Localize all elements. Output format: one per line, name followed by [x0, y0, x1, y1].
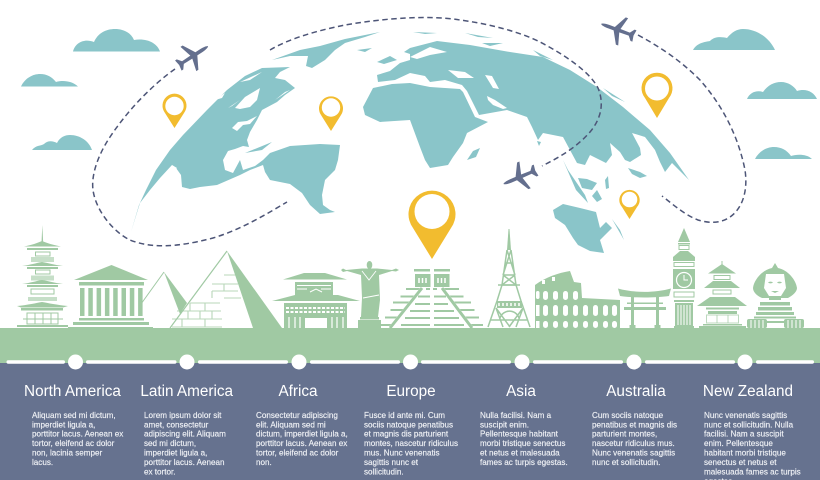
body text: habitant morbi tristique: [704, 449, 786, 458]
body text: non, lacinia semper: [32, 449, 102, 458]
column: North America: [24, 383, 123, 467]
landmark: small pyramid: [141, 272, 187, 314]
body text: penatibus et magnis dis: [592, 420, 677, 429]
heading: New Zealand: [703, 383, 793, 400]
body text: tortor, eleifend ac dolor: [256, 449, 339, 458]
body text: adipiscing elit. Aliquam: [144, 430, 226, 439]
body text: montes, nascetur ridiculus: [364, 439, 458, 448]
body text: mus. Nunc venenatis: [364, 449, 440, 458]
body text: parturient montes,: [592, 430, 657, 439]
landmark: torii gate: [618, 288, 671, 328]
column: New Zealand: [703, 383, 801, 480]
body text: nunc et sollicitudin. Nulla: [704, 420, 794, 429]
body text: elit. Aliquam sed mi: [256, 420, 326, 429]
body text: amet, consectetur: [144, 420, 209, 429]
landmark: Christ the Redeemer: [341, 261, 399, 328]
body text: dictum, imperdiet ligula a,: [256, 430, 348, 439]
Africa: [363, 83, 488, 168]
body text: sociis natoque penatibus: [364, 420, 453, 429]
pin 3: [641, 73, 672, 118]
location pins: [162, 73, 672, 259]
timeline: [6, 354, 814, 370]
landmarks skyline: [17, 225, 804, 328]
body text: Aliquam sed mi dictum,: [32, 411, 116, 420]
heading: North America: [24, 383, 121, 400]
body text: Nunc venenatis sagittis: [592, 449, 675, 458]
body text: nunc et sollicitudin.: [592, 458, 660, 467]
airplanes: [170, 10, 639, 197]
body text: Lorem ipsum dolor sit: [144, 411, 221, 420]
body text: Nulla facilisi. Nam a: [480, 411, 551, 420]
body text: senectus et netus et: [704, 458, 777, 467]
destinations panel: [0, 354, 820, 480]
body text: tortor, eleifend ac dolor: [32, 439, 115, 448]
clouds: [21, 29, 817, 159]
sea details: [172, 47, 507, 170]
body text: enim. Pellentesque: [704, 439, 773, 448]
pin 4: [619, 190, 640, 219]
column: Australia: [592, 383, 677, 467]
body text: suscipit enim.: [480, 420, 529, 429]
pin 1: [162, 94, 186, 128]
heading: Australia: [606, 383, 666, 400]
continents: [131, 32, 689, 253]
body text: et magnis dis parturient: [364, 430, 449, 439]
landmark: great pyramid: [170, 251, 282, 328]
pin 2: [319, 96, 343, 131]
heading: Europe: [386, 383, 436, 400]
landmark: Nepalese temple: [697, 261, 747, 328]
body text: morbi tristique senectus: [480, 439, 565, 448]
body text: imperdiet ligula a,: [32, 420, 95, 429]
landmark: Eiffel Tower: [488, 229, 530, 327]
body text: Nunc venenatis sagittis: [704, 411, 787, 420]
column: Europe: [364, 383, 458, 476]
body text: ex tortor.: [144, 468, 176, 476]
body text: sagittis nunc et: [364, 458, 419, 467]
body text: fames ac turpis egestas.: [480, 458, 568, 467]
landmark: Japanese pagoda: [17, 225, 68, 327]
body text: sollicitudin.: [364, 468, 404, 476]
landmark: Big Ben: [673, 228, 695, 328]
landmark: Colosseum: [535, 271, 620, 328]
body text: Cum sociis natoque: [592, 411, 663, 420]
body text: nascetur ridiculus mus.: [592, 439, 675, 448]
ground band: [0, 328, 820, 364]
body text: malesuada fames ac turpis: [704, 468, 801, 476]
body text: porttitor lacus. Aenean ex: [256, 439, 347, 448]
body text: facilisi. Nam a suscipit: [704, 430, 784, 439]
body text: Consectetur adipiscing: [256, 411, 338, 420]
body text: Pellentesque habitant: [480, 430, 559, 439]
heading: Asia: [506, 383, 536, 400]
body text: Fusce id ante mi. Cum: [364, 411, 445, 420]
islands: [245, 32, 647, 253]
North and South America: [131, 67, 340, 232]
body text: lacus.: [32, 458, 53, 467]
landmark: Greek temple: [68, 265, 153, 328]
landmark: Japanese castle: [272, 273, 360, 328]
body text: porttitor lacus. Aenean ex: [32, 430, 123, 439]
body text: non.: [256, 458, 272, 467]
body text: et netus et malesuada: [480, 449, 560, 458]
body text: imperdiet ligula a,: [144, 449, 207, 458]
column: Latin America: [140, 383, 234, 476]
body text: porttitor lacus. Aenean: [144, 458, 225, 467]
heading: Latin America: [140, 383, 234, 400]
illustrated world map: [21, 10, 817, 259]
flight paths: [93, 18, 746, 246]
column: Asia: [480, 383, 568, 467]
body text: sed mi dictum,: [144, 439, 196, 448]
Eurasia: [377, 41, 689, 180]
landmark: Chichen Itza pyramid: [381, 269, 483, 328]
column: Africa: [256, 383, 348, 467]
landmark: Sphinx: [747, 263, 804, 328]
heading: Africa: [278, 383, 318, 400]
pin 5 large: [408, 191, 455, 259]
panel background: [0, 363, 820, 480]
Greenland: [272, 32, 380, 68]
